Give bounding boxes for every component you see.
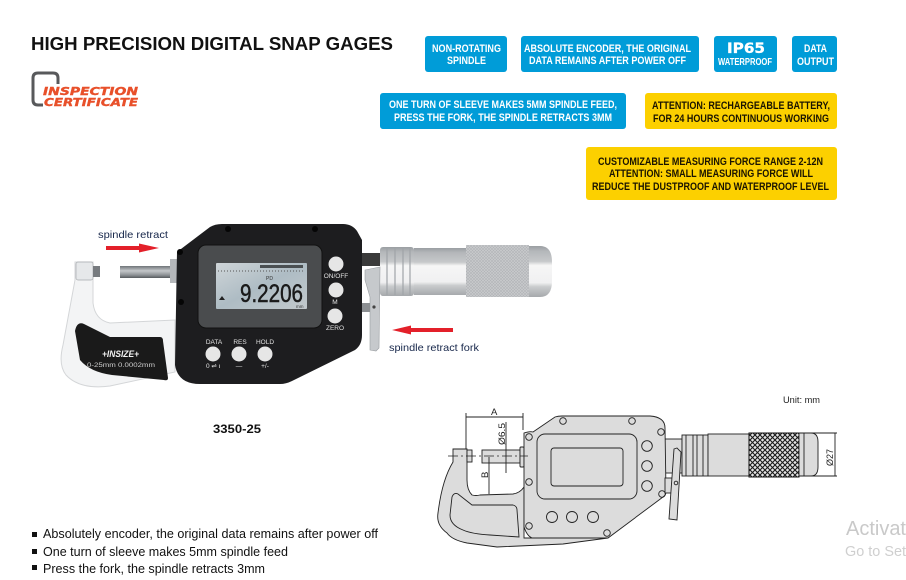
feature list: Absolutely encoder, the original data remains after power off xyxy=(43,527,379,541)
micrometer thimble xyxy=(362,245,552,297)
badge: sleeve and fork: ONE TURN OF SLEEVE MAKES 5MM SPINDLE FEED, xyxy=(389,99,617,111)
bottom button row: — xyxy=(236,363,243,370)
badge: measuring force attention xyxy=(586,147,837,200)
dimension B xyxy=(480,457,491,494)
right button column: ZERO xyxy=(326,325,344,332)
label: spindle retract fork: spindle retract fork xyxy=(389,342,480,354)
logo: inspection certificate: CERTIFICATE xyxy=(44,96,139,109)
badge: rechargeable battery attention xyxy=(645,93,837,129)
feature list xyxy=(32,527,379,576)
badge: rechargeable battery attention: ATTENTION: RECHARGEABLE BATTERY, xyxy=(652,100,830,112)
dimension diameter 6.5 xyxy=(497,422,508,473)
right button column: ON/OFF xyxy=(324,273,348,280)
watermark: Go to Set xyxy=(845,544,906,560)
center line xyxy=(448,455,528,457)
dimension diameter 27 xyxy=(799,433,837,476)
LCD readout xyxy=(216,263,307,309)
watermark xyxy=(845,518,906,560)
bottom button row: DATA xyxy=(206,339,223,346)
spindle xyxy=(120,259,177,283)
fork outline xyxy=(665,448,681,520)
badge: absolute encoder: ABSOLUTE ENCODER, THE ORIGINAL xyxy=(524,43,691,55)
screen outline xyxy=(537,434,637,499)
retract fork xyxy=(362,267,380,351)
badge: measuring force attention: ATTENTION: SMALL MEASURING FORCE WILL xyxy=(609,168,813,180)
thimble outline xyxy=(665,433,818,477)
right button column: M xyxy=(332,299,338,306)
logo: inspection certificate xyxy=(33,73,139,109)
LCD readout: mm xyxy=(296,304,304,309)
device body xyxy=(175,224,362,384)
bottom button row: +/- xyxy=(261,363,269,370)
badge: non-rotating spindle: NON-ROTATING xyxy=(432,43,501,55)
badge: rechargeable battery attention: FOR 24 HOURS CONTINUOUS WORKING xyxy=(653,113,829,125)
frame xyxy=(61,262,175,387)
technical drawing xyxy=(438,407,837,547)
arrow: retract fork xyxy=(392,326,453,334)
bottom button row: 0 ⇌ ι xyxy=(206,363,221,370)
display bezel xyxy=(198,245,322,328)
dimension A xyxy=(466,407,523,449)
dimension diameter 6.5: Ø6.5 xyxy=(497,423,508,445)
bottom button row: HOLD xyxy=(256,339,274,346)
label: spindle retract: spindle retract xyxy=(98,229,168,241)
logo: inspection certificate: INSPECTION xyxy=(43,85,138,98)
dimension B: B xyxy=(480,472,491,478)
anvil xyxy=(76,262,100,280)
feature list: One turn of sleeve makes 5mm spindle feed xyxy=(43,545,288,559)
badge: IP65 waterproof: WATERPROOF xyxy=(718,57,772,68)
badge: non-rotating spindle xyxy=(425,36,507,72)
product photo: digital snap gage xyxy=(61,224,552,387)
badge: data output: OUTPUT xyxy=(797,56,834,68)
dimension A: A xyxy=(491,407,498,418)
drawing body xyxy=(524,416,666,538)
frame plate with brand xyxy=(75,323,168,380)
frame outline xyxy=(438,449,608,547)
bottom button row: RES xyxy=(233,339,247,346)
badge: IP65 waterproof xyxy=(714,36,777,72)
watermark: Activat xyxy=(846,518,906,540)
badge: absolute encoder: DATA REMAINS AFTER POWER OFF xyxy=(529,55,686,67)
arrow: spindle retract xyxy=(106,244,159,252)
feature list: Press the fork, the spindle retracts 3mm xyxy=(43,562,265,576)
badge: data output xyxy=(792,36,837,72)
dimension diameter 27: Ø27 xyxy=(825,449,835,466)
badge: measuring force attention: CUSTOMIZABLE MEASURING FORCE RANGE 2-12N xyxy=(598,156,823,168)
badge: sleeve and fork: PRESS THE FORK, THE SPINDLE RETRACTS 3MM xyxy=(394,112,612,124)
buttons and screws xyxy=(526,418,665,536)
LCD readout: PD xyxy=(266,276,273,282)
badge: data output: DATA xyxy=(804,43,827,55)
badge: non-rotating spindle: SPINDLE xyxy=(447,55,486,67)
bottom button row xyxy=(206,339,274,370)
anvil and spindle xyxy=(467,447,524,467)
badge: IP65 waterproof: IP65 xyxy=(727,41,765,57)
frame plate with brand: +INSIZE+ xyxy=(102,349,140,359)
right button column xyxy=(324,256,348,332)
LCD readout: 9.2206 xyxy=(240,280,303,308)
badge: absolute encoder xyxy=(521,36,699,72)
model number: 3350-25 xyxy=(213,422,261,436)
unit note: Unit: mm xyxy=(783,395,820,405)
badge: measuring force attention: REDUCE THE DUSTPROOF AND WATERPROOF LEVEL xyxy=(592,181,829,193)
badge: sleeve and fork xyxy=(380,93,626,129)
title: HIGH PRECISION DIGITAL SNAP GAGES xyxy=(31,34,393,54)
frame grip xyxy=(450,493,519,537)
frame plate with brand: 0-25mm 0.0002mm xyxy=(87,362,155,369)
